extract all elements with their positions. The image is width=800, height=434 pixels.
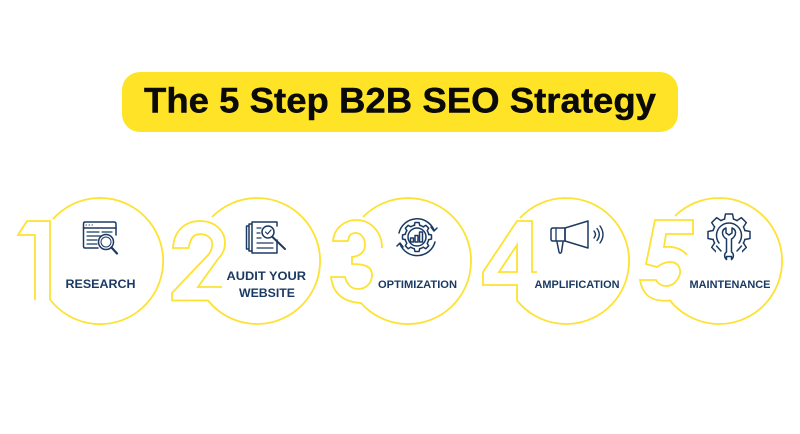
numeral 1 with circle outline xyxy=(18,198,163,324)
title xyxy=(122,72,678,132)
numeral 5 with circle outline xyxy=(640,198,782,324)
step 2: audit your website xyxy=(172,198,320,324)
title: The 5 Step B2B SEO Strategy xyxy=(144,82,657,120)
label: WEBSITE xyxy=(239,286,295,300)
label: MAINTENANCE xyxy=(690,279,770,291)
label: AMPLIFICATION xyxy=(534,279,620,291)
numeral 2 with circle outline xyxy=(172,198,320,324)
label: AUDIT YOUR xyxy=(226,269,306,283)
step 4: amplification xyxy=(483,198,629,324)
label xyxy=(226,269,306,300)
icon: megaphone xyxy=(551,221,603,253)
icon: gear with wrench xyxy=(708,214,750,260)
icon: gear with chart xyxy=(397,219,437,256)
icon: browser window with magnifier xyxy=(84,222,117,254)
numeral 4 counter xyxy=(499,245,517,272)
label: OPTIMIZATION xyxy=(378,279,457,291)
label: RESEARCH xyxy=(66,277,136,291)
step 1: research xyxy=(18,198,163,324)
icon: documents with magnifier xyxy=(246,222,285,253)
step 3: optimization xyxy=(331,198,471,324)
numeral 3 with circle outline xyxy=(331,198,471,324)
step 5: maintenance xyxy=(640,198,782,324)
numeral 4 with circle outline xyxy=(483,198,629,324)
